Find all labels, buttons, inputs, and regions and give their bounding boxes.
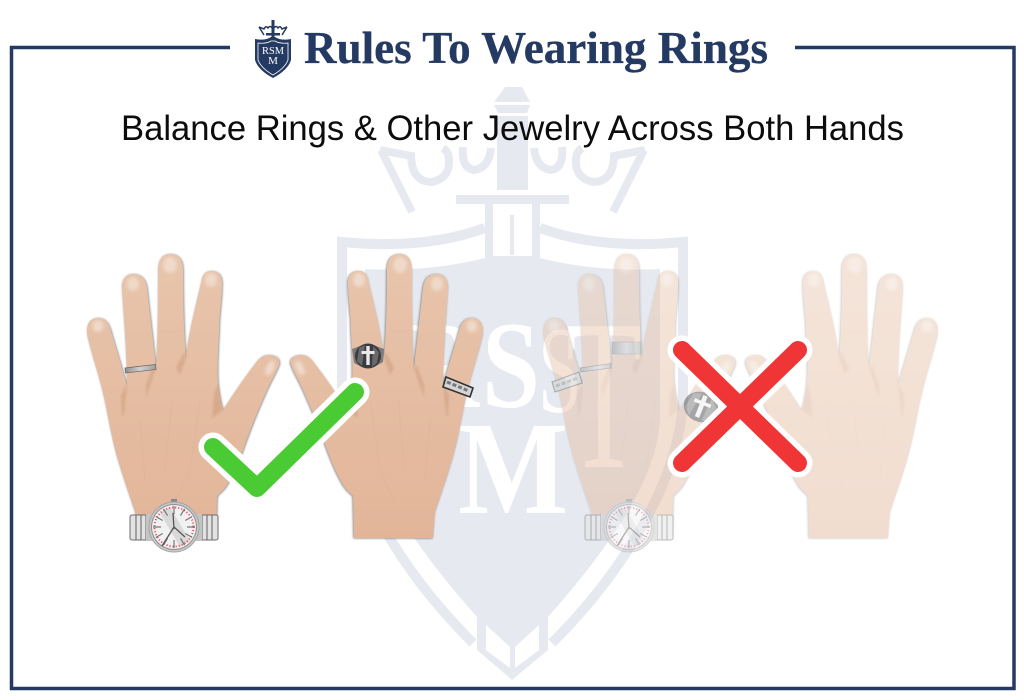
watermark: monogram letters [411,275,642,542]
ring: wide patterned band [443,377,473,397]
icon: sword on crest [266,20,280,38]
right hand bare [745,254,938,538]
watermark: crown [380,147,645,212]
watermark: monogram letters: T [566,275,642,514]
icon: green check mark [213,392,355,488]
watermark: monogram letters: R [411,297,480,434]
watermark: monogram letters: S [482,297,540,434]
correct example: balanced hands [87,254,483,552]
right hand with signet and band [290,254,483,538]
ring: signet with cross [352,344,384,368]
incorrect example: unbalanced hands, faded [543,254,938,552]
icon: wristwatch [585,499,673,552]
icon: crown on crest [259,26,287,35]
ring: wide band on middle finger [612,342,641,354]
watermark: monogram letters: M [458,394,568,542]
logo crest [255,20,291,78]
left hand with every ring and watch [543,254,736,552]
logo crest: M [268,55,278,67]
watermark: shield body [365,256,660,680]
icon: shield on crest [255,37,291,78]
watermark: monogram letters: S [538,302,582,439]
icon: red cross mark [682,350,798,463]
watermark: shield, sword and crown emblem [342,87,683,680]
left hand with ring and watch [87,254,280,552]
title: Rules To Wearing Rings [304,22,768,73]
subtitle: Balance Rings & Other Jewelry Across Both Hands [121,109,904,148]
ring: signet on thumb [679,387,723,427]
watermark: shield outline [342,228,683,643]
icon: wristwatch [130,499,218,552]
ring: thin band on ring finger [580,364,611,372]
ring: thin silver band [125,364,156,373]
crest monogram: RSM [262,46,284,57]
ring: patterned band on pinky [552,372,582,392]
watermark: pommel and sword grip [456,87,569,258]
